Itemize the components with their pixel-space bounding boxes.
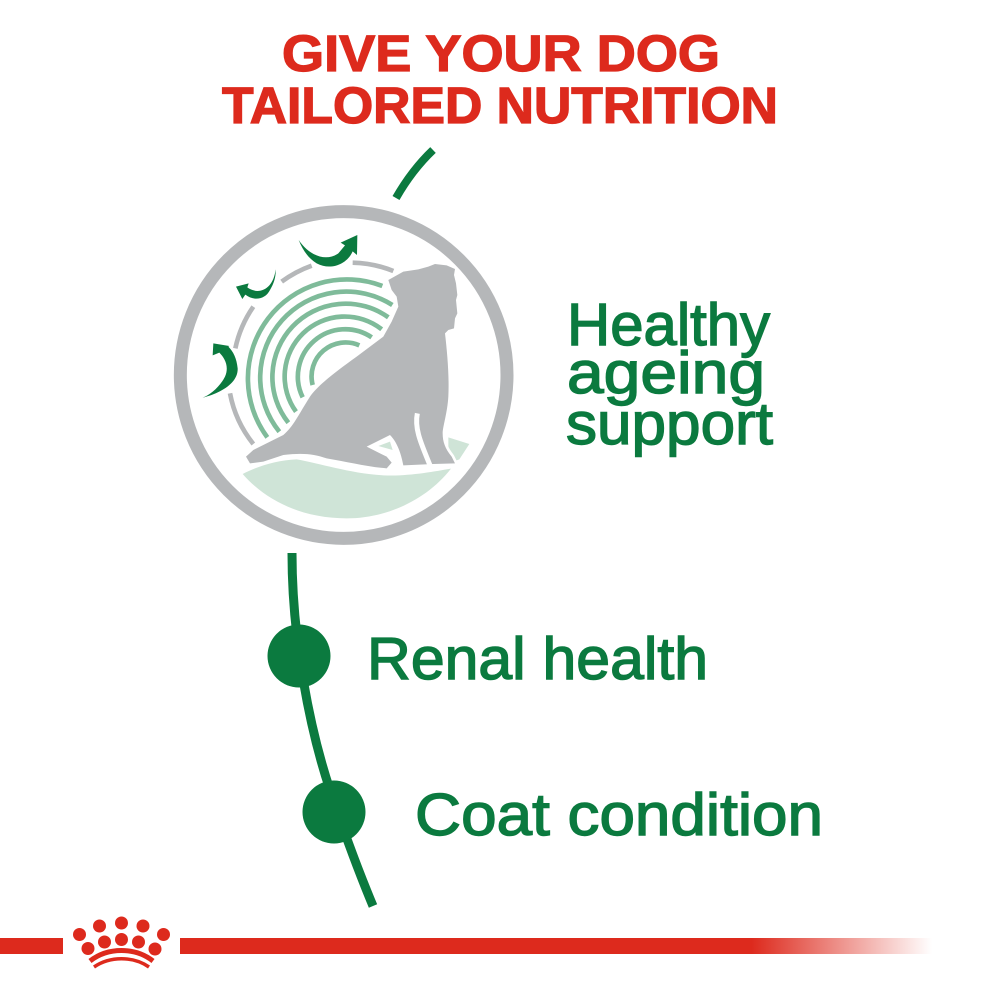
arrow: right (299, 235, 357, 267)
arrow: left (203, 343, 238, 398)
grey arc segments (230, 263, 393, 444)
badge ring (180, 212, 507, 538)
white gap between front legs (417, 413, 430, 465)
arrow: middle (236, 269, 276, 299)
footer bar: left (0, 938, 63, 954)
green concentric arcs (248, 279, 392, 437)
label: renal health: Renal health (367, 626, 708, 692)
icon: crown logo (73, 916, 170, 967)
connector line: title to badge (396, 150, 433, 198)
label: healthy ageing support: ageing (567, 340, 765, 406)
label: coat condition: Coat condition (415, 782, 823, 848)
icon: healthy ageing badge (180, 212, 507, 538)
ground patch (243, 459, 451, 518)
label: healthy ageing support: Healthy (567, 292, 771, 358)
ground wedge (448, 437, 469, 463)
footer bar: right fading (180, 938, 932, 954)
bullet: renal health (268, 624, 330, 688)
title: GIVE YOUR DOG (282, 25, 720, 82)
title (222, 25, 778, 134)
dog silhouette (246, 264, 457, 468)
label: healthy ageing support: support (566, 391, 773, 457)
label: healthy ageing support (566, 292, 773, 457)
bullet: coat condition (302, 780, 366, 844)
title: TAILORED NUTRITION (222, 77, 778, 134)
green patch under paw (378, 442, 393, 450)
timeline curve (292, 553, 373, 906)
